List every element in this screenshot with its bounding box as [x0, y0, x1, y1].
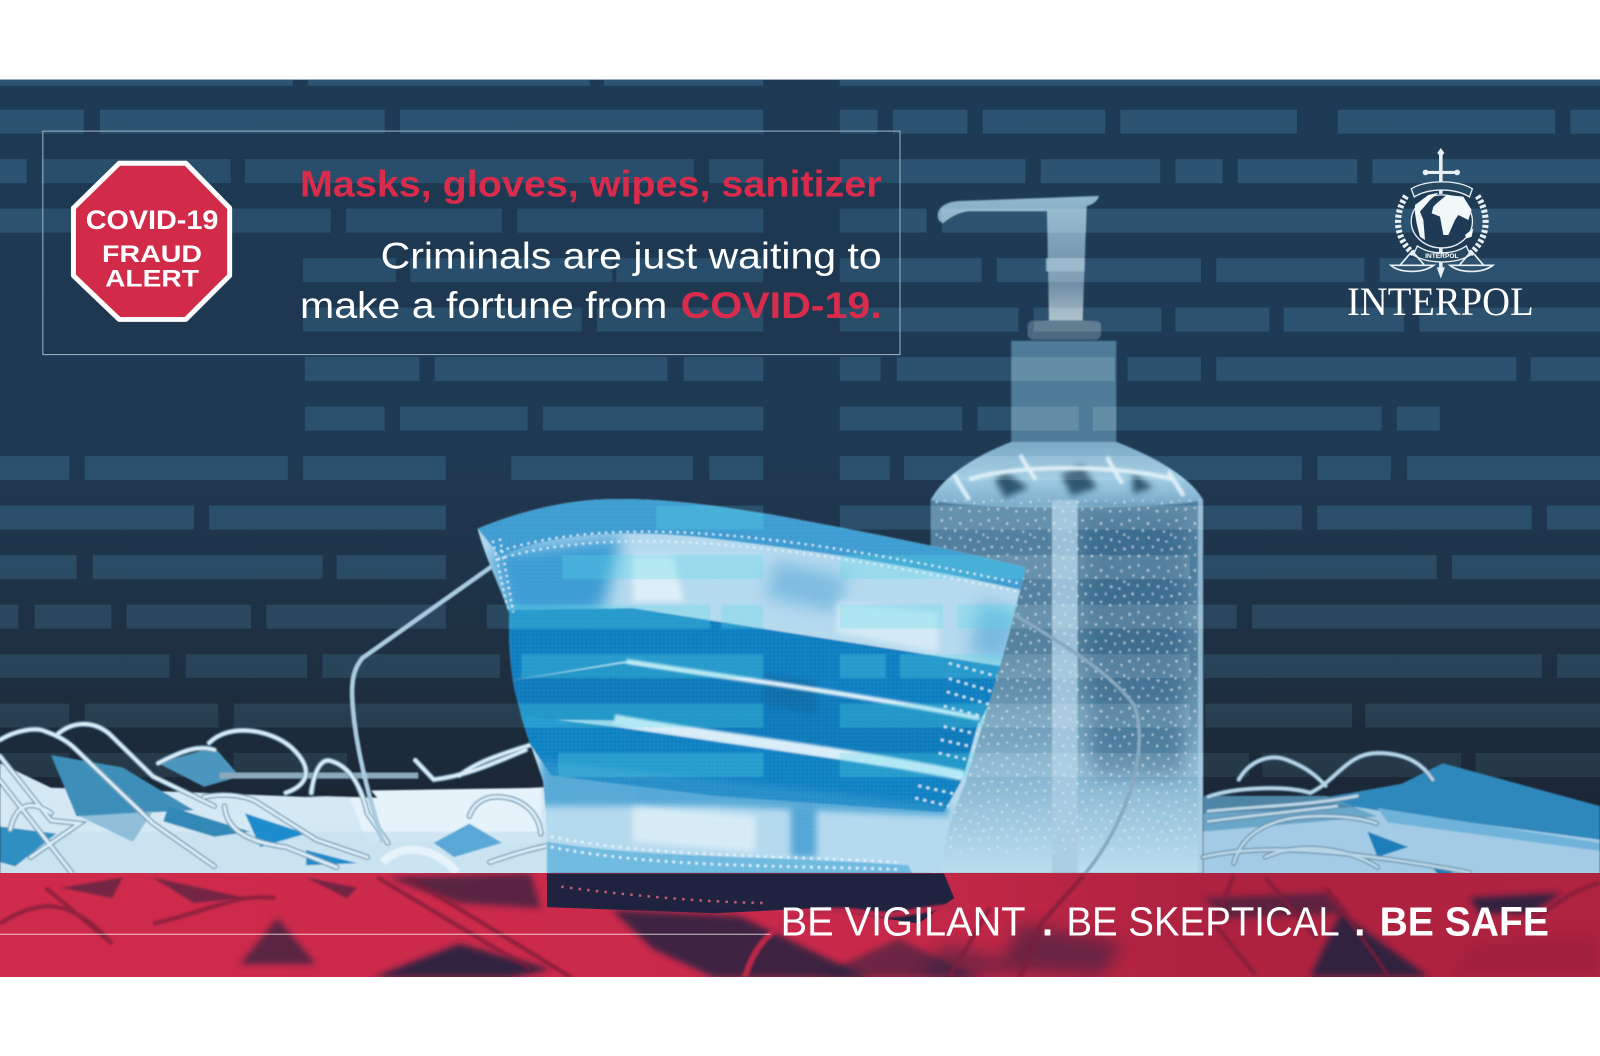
pleats dark	[505, 608, 1008, 722]
translucent bricks over bottle	[930, 208, 1203, 777]
top banner	[1411, 182, 1472, 197]
bottom stitching	[551, 837, 898, 869]
thick foreground loop	[383, 850, 457, 872]
ear loops in band	[0, 876, 1600, 978]
pile of masks left	[0, 724, 551, 876]
top hem	[478, 499, 1026, 590]
globe	[1411, 195, 1472, 248]
stitched seam in shadow	[561, 887, 765, 903]
band dark smudges	[372, 944, 551, 978]
dark navy shadow under mask	[547, 873, 954, 923]
tagline: BE SKEPTICAL	[1066, 899, 1340, 945]
tagline: .	[1354, 899, 1365, 945]
upper tint	[490, 536, 622, 622]
bottle collar	[1028, 320, 1101, 340]
ear loops outlines	[0, 724, 551, 872]
bottle pump head	[938, 196, 1099, 320]
blue mask pieces	[51, 755, 194, 816]
side stitching	[915, 663, 1005, 806]
pile of masks right	[1203, 753, 1600, 876]
dark gap	[306, 788, 378, 798]
laurel	[1398, 196, 1486, 255]
right light masks	[1203, 806, 1600, 876]
message text: COVID-19.	[681, 285, 882, 326]
tagline: BE SAFE	[1380, 899, 1549, 945]
gel bubbles	[935, 500, 1200, 852]
right ear loop highlights	[1203, 753, 1469, 872]
right blue mask	[1310, 763, 1600, 840]
tagline: BE VIGILANT	[781, 899, 1026, 945]
stop sign icon: ALERT	[105, 266, 199, 293]
top stitching	[498, 532, 1020, 592]
stop sign icon	[73, 163, 230, 319]
bottle neck	[1011, 341, 1116, 443]
scales	[1391, 251, 1493, 271]
stop sign icon: FRAUD	[102, 241, 202, 268]
red footer band	[0, 873, 1600, 978]
mask ear loop right	[1010, 612, 1139, 876]
light mask pile base	[0, 763, 551, 876]
dark brick background panel	[0, 80, 1600, 896]
hand sanitizer bottle	[931, 196, 1203, 873]
dip tube	[1052, 500, 1078, 873]
ear loops highlights	[0, 724, 551, 872]
white mottling	[633, 556, 684, 602]
interpol wordmark: INTERPOL	[1347, 280, 1534, 324]
message text: Criminals are just waiting to	[381, 235, 882, 276]
mask ear loop left	[352, 564, 495, 842]
bottle body	[931, 442, 1203, 873]
alert box	[43, 131, 900, 355]
stop sign icon: COVID-19	[86, 205, 218, 235]
message text: make a fortune from	[300, 285, 667, 326]
tagline: .	[1042, 899, 1053, 945]
back strap	[219, 773, 418, 779]
tagline rule	[0, 934, 770, 935]
translucent bricks on mask	[508, 506, 1025, 778]
fold highlights	[627, 661, 980, 718]
pump ring	[1046, 258, 1085, 271]
bottle shoulder	[931, 442, 1203, 508]
headline: Masks, gloves, wipes, sanitizer	[300, 164, 882, 205]
right ear loop outlines	[1203, 753, 1469, 872]
lower white mottling	[633, 806, 755, 852]
sword	[1439, 151, 1443, 271]
mask body	[476, 498, 1026, 873]
continents	[1415, 193, 1473, 240]
interpol emblem	[1391, 148, 1493, 279]
dark liquid shade	[1082, 510, 1184, 776]
surgical mask	[348, 498, 1142, 873]
tagline	[781, 899, 1549, 945]
bottom banner	[1413, 246, 1470, 262]
emblem banner lettering: INTERPOL	[1425, 253, 1459, 260]
message text	[300, 235, 882, 326]
bright loops in shadow	[745, 906, 959, 978]
bottom hem	[547, 842, 913, 876]
